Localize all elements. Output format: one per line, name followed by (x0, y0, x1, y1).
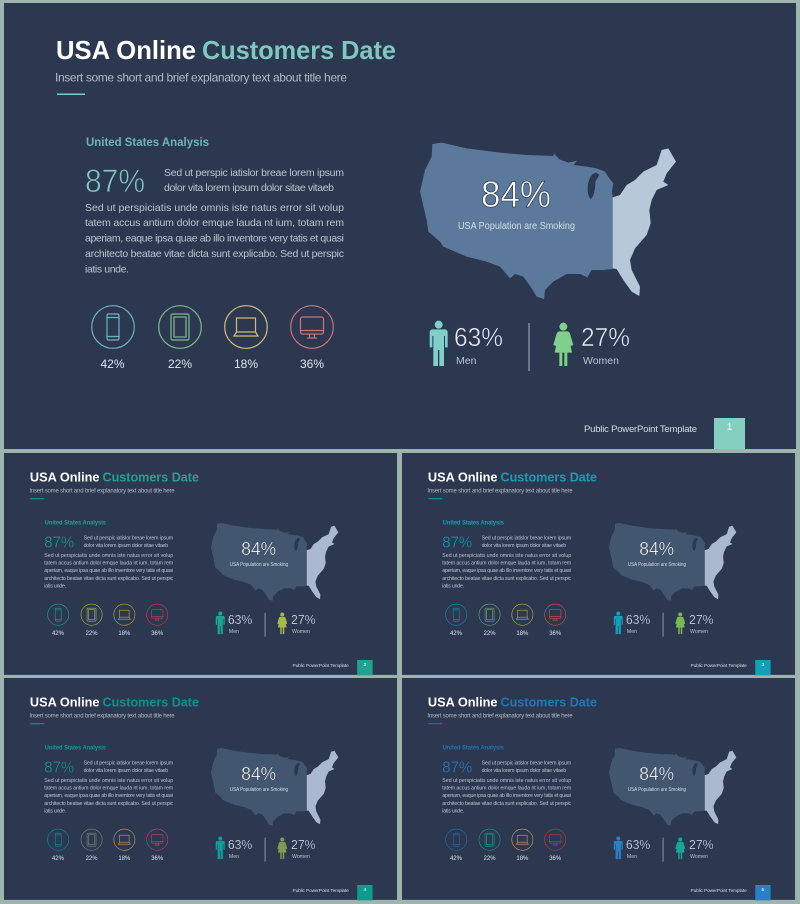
men stat: 63% (228, 612, 253, 627)
body text: Sed ut perspic iatislor breae lorem ipsum (84, 761, 173, 767)
device percentages (450, 856, 562, 862)
map stat: 84% (241, 763, 276, 784)
page number (714, 418, 745, 449)
device percentages: 22% (484, 631, 496, 637)
section heading: United States Analysis (45, 521, 107, 527)
footer label: Public PowerPoint Template (691, 663, 747, 669)
footer label: Public PowerPoint Template (293, 663, 349, 669)
slide 3: cyan panel (402, 453, 795, 675)
body text: iatis unde. (85, 264, 129, 276)
title underline (57, 94, 85, 95)
map stat: 84% (481, 174, 551, 215)
title: Customers Date (202, 35, 396, 65)
page number (755, 660, 771, 675)
section heading: United States Analysis (45, 746, 107, 752)
map stat: USA Population are Smoking (230, 562, 288, 568)
body text: dolor vita lorem ipsum dolor sitae vitaeb (482, 543, 566, 549)
subtitle: Insert some short and brief explanatory text about title here (29, 489, 175, 495)
device percentages: 36% (151, 856, 164, 862)
device icons (446, 604, 566, 625)
map stat (628, 763, 686, 793)
big stat 87%: 87% (44, 760, 74, 777)
device percentages: 36% (300, 357, 324, 371)
page number: 3 (762, 662, 765, 668)
page number (357, 885, 373, 900)
usa map (609, 748, 736, 826)
body text: iatis unde. (44, 584, 66, 590)
women stat (675, 612, 714, 635)
map stat (230, 538, 288, 568)
map stat: USA Population are Smoking (628, 562, 686, 568)
women stat (277, 612, 316, 635)
body text: iatis unde. (442, 809, 464, 815)
device percentages: 42% (100, 357, 125, 371)
page number: 5 (762, 887, 765, 893)
men stat: Men (229, 854, 239, 860)
men stat: 63% (626, 612, 651, 627)
device percentages: 42% (450, 631, 463, 637)
usa map (609, 523, 736, 601)
device percentages: 18% (234, 357, 258, 371)
section heading: United States Analysis (443, 521, 505, 527)
title underline (30, 722, 44, 725)
usa map (211, 523, 338, 601)
men stat: Men (627, 854, 637, 860)
body text: aperiam, eaque ipsa quae ab illo inventore very tatis et quasi (44, 568, 173, 574)
footer label: Public PowerPoint Template (691, 888, 747, 894)
title underline (30, 497, 44, 500)
map stat: USA Population are Smoking (458, 220, 575, 232)
title underline (428, 722, 442, 725)
body text: aperiam, eaque ipsa quae ab illo inventore very tatis et quasi (85, 232, 344, 244)
device percentages: 18% (516, 856, 529, 862)
device percentages (100, 357, 324, 371)
body text: iatis unde. (44, 809, 66, 815)
subtitle: Insert some short and brief explanatory text about title here (427, 714, 573, 720)
device icons (48, 829, 168, 850)
body text: dolor vita lorem ipsum dolor sitae vitaeb (84, 543, 168, 549)
device icons (446, 829, 566, 850)
body text: tatem accus antium dolor emque lauda nt ium, totam rem (44, 785, 173, 791)
body text (85, 167, 344, 276)
title: USA Online (30, 469, 100, 484)
device icons (92, 306, 333, 348)
body text: iatis unde. (442, 584, 464, 590)
device percentages: 36% (549, 631, 562, 637)
body text (44, 761, 174, 815)
body text: Sed ut perspiciatis unde omnis iste natus error sit volup (442, 553, 571, 559)
slide 4: teal panel (4, 678, 397, 900)
men stat: Men (456, 355, 477, 367)
device percentages: 42% (52, 856, 65, 862)
men stat (614, 612, 651, 635)
body text: Sed ut perspiciatis unde omnis iste natus error sit volup (85, 202, 344, 214)
body text: architecto beatae vitae dicta sunt explicabo. Sed ut perspic (44, 576, 174, 582)
women stat: Women (292, 854, 310, 860)
slide 2: green panel (4, 453, 397, 675)
women stat (675, 837, 714, 860)
men stat: Men (229, 629, 239, 635)
men stat: Men (627, 629, 637, 635)
body text: Sed ut perspiciatis unde omnis iste natus error sit volup (44, 553, 173, 559)
women stat: 27% (581, 322, 630, 352)
device icons (48, 604, 168, 625)
big stat 87%: 87% (85, 163, 145, 199)
body text (44, 536, 174, 590)
device percentages: 42% (52, 631, 65, 637)
body text: tatem accus antium dolor emque lauda nt ium, totam rem (44, 560, 173, 566)
women stat: Women (690, 629, 708, 635)
map stat: 84% (241, 538, 276, 559)
body text: Sed ut perspic iatislor breae lorem ipsum (84, 536, 173, 542)
body text: tatem accus antium dolor emque lauda nt ium, totam rem (442, 560, 571, 566)
men stat: 63% (454, 322, 503, 352)
body text: architecto beatae vitae dicta sunt explicabo. Sed ut perspic (442, 576, 572, 582)
body text: aperiam, eaque ipsa quae ab illo inventore very tatis et quasi (442, 793, 571, 799)
title: Customers Date (102, 469, 199, 484)
divider (662, 613, 664, 637)
title underline (428, 497, 442, 500)
device percentages: 36% (549, 856, 562, 862)
title: Customers Date (102, 694, 199, 709)
body text: Sed ut perspiciatis unde omnis iste natus error sit volup (442, 778, 571, 784)
device percentages: 22% (484, 856, 496, 862)
body text: Sed ut perspic iatislor breae lorem ipsum (482, 761, 571, 767)
body text: architecto beatae vitae dicta sunt explicabo. Sed ut perspic (442, 801, 572, 807)
device percentages: 22% (168, 357, 192, 371)
subtitle: Insert some short and brief explanatory text about title here (427, 489, 573, 495)
device percentages (52, 856, 164, 862)
women stat: Women (583, 355, 619, 367)
women stat: Women (292, 629, 310, 635)
body text (442, 761, 572, 815)
women stat: Women (690, 854, 708, 860)
device percentages: 42% (450, 856, 463, 862)
device percentages (52, 631, 164, 637)
women stat: 27% (689, 612, 714, 627)
map stat (628, 538, 686, 568)
big stat 87%: 87% (44, 535, 74, 552)
body text: tatem accus antium dolor emque lauda nt ium, totam rem (442, 785, 571, 791)
usa map (420, 143, 676, 299)
body text: aperiam, eaque ipsa quae ab illo inventore very tatis et quasi (44, 793, 173, 799)
map stat: 84% (639, 538, 674, 559)
body text: dolor vita lorem ipsum dolor sitae vitaeb (482, 768, 566, 774)
device percentages: 22% (86, 856, 98, 862)
women stat: 27% (291, 612, 316, 627)
divider (264, 613, 266, 637)
footer label: Public PowerPoint Template (584, 424, 697, 435)
men stat (216, 612, 253, 635)
section heading: United States Analysis (443, 746, 505, 752)
men stat: 63% (626, 837, 651, 852)
title: USA Online (428, 469, 498, 484)
map stat: USA Population are Smoking (230, 787, 288, 793)
page number (357, 660, 373, 675)
body text: Sed ut perspic iatislor breae lorem ipsum (482, 536, 571, 542)
map stat (230, 763, 288, 793)
body text: architecto beatae vitae dicta sunt explicabo. Sed ut perspic (44, 801, 174, 807)
divider (662, 838, 664, 862)
device percentages: 18% (118, 856, 131, 862)
men stat (614, 837, 651, 860)
slide 5: blue panel (402, 678, 795, 900)
women stat (277, 837, 316, 860)
page number: 1 (727, 422, 733, 433)
body text: dolor vita lorem ipsum dolor sitae vitaeb (84, 768, 168, 774)
body text: aperiam, eaque ipsa quae ab illo inventore very tatis et quasi (442, 568, 571, 574)
body text: Sed ut perspic iatislor breae lorem ipsum (164, 167, 344, 179)
body text: dolor vita lorem ipsum dolor sitae vitaeb (164, 182, 334, 194)
map stat: USA Population are Smoking (628, 787, 686, 793)
men stat: 63% (228, 837, 253, 852)
men stat (430, 321, 503, 367)
device percentages: 18% (118, 631, 131, 637)
title: USA Online (56, 35, 196, 65)
usa map (211, 748, 338, 826)
device percentages: 36% (151, 631, 164, 637)
page number: 2 (364, 662, 367, 668)
women stat: 27% (291, 837, 316, 852)
title: USA Online (428, 694, 498, 709)
subtitle: Insert some short and brief explanatory text about title here (29, 714, 175, 720)
body text: tatem accus antium dolor emque lauda nt ium, totam rem (85, 217, 344, 229)
page number: 4 (364, 887, 367, 893)
page number (755, 885, 771, 900)
divider (528, 323, 530, 371)
big stat 87%: 87% (442, 760, 472, 777)
divider (264, 838, 266, 862)
men stat (216, 837, 253, 860)
body text (442, 536, 572, 590)
body text: architecto beatae vitae dicta sunt explicabo. Sed ut perspic (85, 248, 344, 260)
section heading: United States Analysis (86, 135, 209, 149)
map stat: 84% (639, 763, 674, 784)
title: Customers Date (500, 694, 597, 709)
device percentages (450, 631, 562, 637)
women stat: 27% (689, 837, 714, 852)
subtitle: Insert some short and brief explanatory text about title here (55, 70, 347, 84)
map stat (458, 174, 575, 232)
slide 1: main panel (4, 3, 796, 449)
title: USA Online (30, 694, 100, 709)
big stat 87%: 87% (442, 535, 472, 552)
device percentages: 22% (86, 631, 98, 637)
body text: Sed ut perspiciatis unde omnis iste natus error sit volup (44, 778, 173, 784)
footer label: Public PowerPoint Template (293, 888, 349, 894)
women stat (553, 322, 630, 367)
device percentages: 18% (516, 631, 529, 637)
title: Customers Date (500, 469, 597, 484)
